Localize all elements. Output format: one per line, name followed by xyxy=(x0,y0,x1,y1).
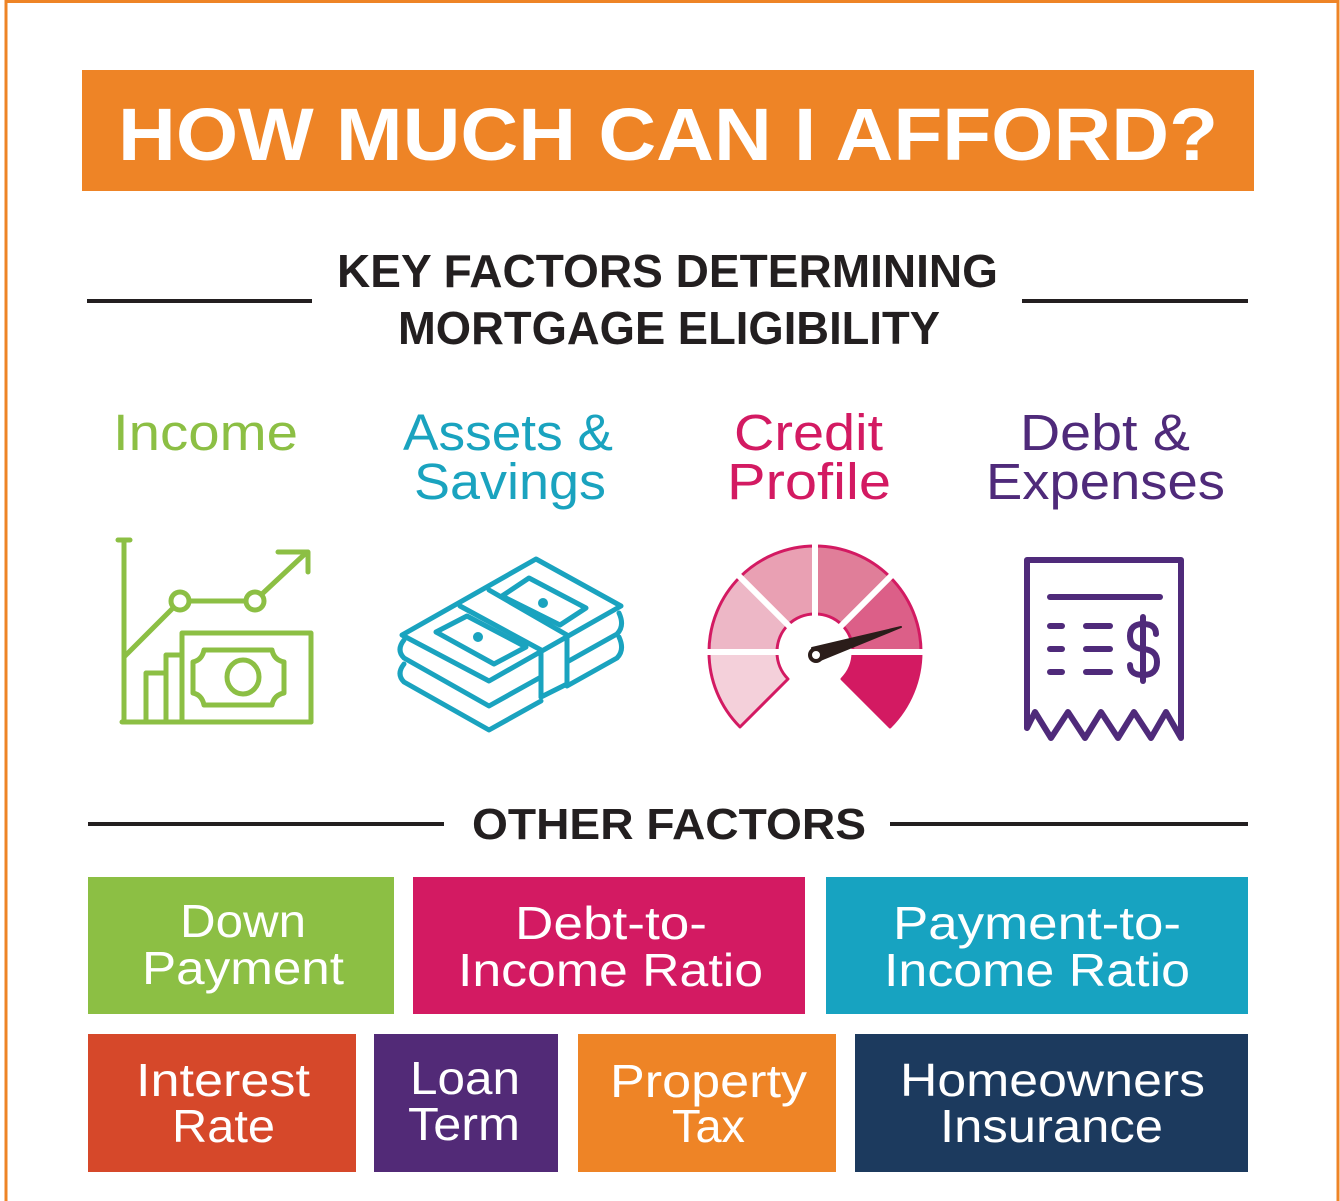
box: interest rate: Rate xyxy=(172,1100,275,1152)
label: debt & expenses: Debt & xyxy=(1020,404,1190,461)
box: loan term xyxy=(374,1034,558,1172)
icon: stack of money xyxy=(400,559,622,730)
heading: key factors: KEY FACTORS DETERMINING xyxy=(337,245,998,297)
box: loan term: Loan xyxy=(410,1052,520,1104)
box: down payment xyxy=(88,877,394,1014)
icon: income chart with bill xyxy=(118,540,311,722)
box: interest rate: Interest xyxy=(136,1054,310,1106)
label: credit profile: Profile xyxy=(727,453,891,510)
box: payment-to-income ratio: Income Ratio xyxy=(884,944,1190,996)
label: assets & savings: Savings xyxy=(414,453,606,510)
box: property tax xyxy=(578,1034,836,1172)
box: payment-to-income ratio: Payment-to- xyxy=(893,897,1181,949)
box: debt-to-income ratio: Income Ratio xyxy=(458,944,763,996)
label: assets & savings: Assets & xyxy=(403,404,613,461)
box: down payment: Down xyxy=(180,895,306,947)
heading: key factors xyxy=(337,245,998,354)
heading: key factors: MORTGAGE ELIGIBILITY xyxy=(398,302,940,354)
label: income: Income xyxy=(113,404,298,461)
label: credit profile: Credit xyxy=(734,404,883,461)
title banner: HOW MUCH CAN I AFFORD? xyxy=(118,93,1218,176)
box: homeowners insurance: Insurance xyxy=(940,1100,1163,1152)
box: down payment: Payment xyxy=(142,942,344,994)
box: payment-to-income ratio xyxy=(826,877,1248,1014)
box: property tax: Tax xyxy=(672,1100,745,1152)
box: homeowners insurance xyxy=(855,1034,1248,1172)
box: property tax: Property xyxy=(610,1055,807,1107)
icon: receipt xyxy=(1027,560,1181,738)
label: assets & savings xyxy=(403,404,613,510)
box: loan term: Term xyxy=(408,1098,520,1150)
title banner xyxy=(82,70,1254,191)
box: debt-to-income ratio xyxy=(413,877,805,1014)
box: interest rate xyxy=(88,1034,356,1172)
label: debt & expenses xyxy=(986,404,1225,510)
heading: other factors: OTHER FACTORS xyxy=(472,800,866,849)
label: debt & expenses: Expenses xyxy=(986,453,1225,510)
label: credit profile xyxy=(727,404,891,510)
box: debt-to-income ratio: Debt-to- xyxy=(515,897,707,949)
box: homeowners insurance: Homeowners xyxy=(900,1054,1205,1106)
icon: credit score gauge xyxy=(700,540,930,727)
